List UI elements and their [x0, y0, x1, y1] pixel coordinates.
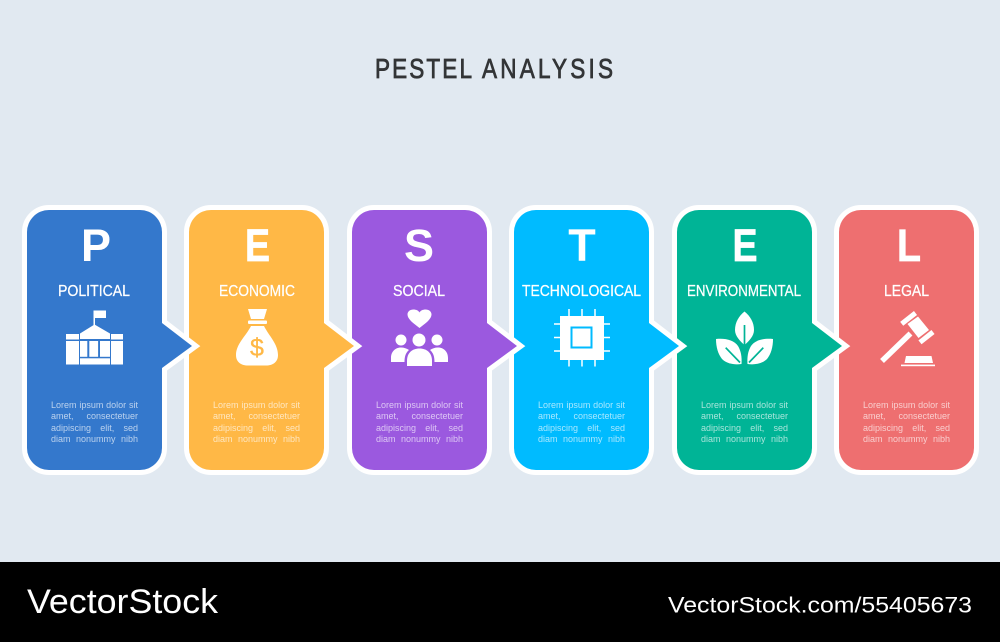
body text: diam nonummy nibh: [376, 434, 463, 444]
body text: [538, 400, 625, 444]
body text: [376, 400, 463, 444]
body text: Lorem ipsum dolor sit: [701, 400, 788, 410]
body text: Lorem ipsum dolor sit: [51, 400, 138, 410]
letter P: P: [81, 220, 111, 271]
body text: amet, consectetuer: [538, 411, 625, 421]
card shape: [677, 210, 842, 470]
icon: gavel: [882, 313, 935, 366]
body text: adipiscing elit, sed: [213, 422, 300, 432]
title: PESTEL: [375, 54, 472, 84]
panel: environmental: [672, 205, 850, 475]
icon: microchip: [554, 309, 610, 366]
icon: government building: [66, 310, 123, 364]
title: ANALYSIS: [482, 54, 613, 84]
panel: economic: [184, 205, 362, 475]
panel: political: [22, 205, 200, 475]
card shape: [27, 210, 192, 470]
heading: social: SOCIAL: [393, 283, 445, 300]
letter E: E: [245, 220, 270, 271]
watermark logo: VectorStock: [27, 583, 219, 621]
watermark url: VectorStock.com/55405673: [668, 592, 972, 617]
letter T: T: [568, 220, 596, 271]
body text: adipiscing elit, sed: [376, 422, 463, 432]
title: [375, 54, 613, 84]
panel: legal: [834, 205, 979, 475]
body text: amet, consectetuer: [376, 411, 463, 421]
card shape: [352, 210, 517, 470]
body text: amet, consectetuer: [213, 411, 300, 421]
body text: Lorem ipsum dolor sit: [538, 400, 625, 410]
body text: diam nonummy nibh: [863, 434, 950, 444]
card shape: [514, 210, 679, 470]
body text: adipiscing elit, sed: [701, 422, 788, 432]
footer bar: [0, 562, 1000, 642]
body text: adipiscing elit, sed: [863, 422, 950, 432]
body text: amet, consectetuer: [701, 411, 788, 421]
heading: economic: ECONOMIC: [219, 283, 295, 300]
icon: people with heart: [391, 310, 448, 366]
body text: amet, consectetuer: [863, 411, 950, 421]
body text: Lorem ipsum dolor sit: [863, 400, 950, 410]
icon: money bag: [236, 309, 278, 366]
body text: diam nonummy nibh: [51, 434, 138, 444]
card shape: [839, 210, 974, 470]
letter S: S: [404, 220, 434, 271]
body text: diam nonummy nibh: [213, 434, 300, 444]
panel: social: [347, 205, 526, 475]
body text: amet, consectetuer: [51, 411, 138, 421]
body text: [51, 400, 138, 444]
body text: diam nonummy nibh: [538, 434, 625, 444]
panel: technological: [509, 205, 688, 475]
letter L: L: [897, 220, 921, 271]
body text: diam nonummy nibh: [701, 434, 788, 444]
letter E: E: [732, 220, 758, 271]
body text: [863, 400, 950, 444]
body text: [213, 400, 300, 444]
body text: Lorem ipsum dolor sit: [376, 400, 463, 410]
body text: Lorem ipsum dolor sit: [213, 400, 300, 410]
body text: adipiscing elit, sed: [538, 422, 625, 432]
card shape: [189, 210, 354, 470]
body text: [701, 400, 788, 444]
heading: environmental: ENVIRONMENTAL: [687, 283, 801, 300]
heading: legal: LEGAL: [884, 283, 929, 300]
heading: technological: TECHNOLOGICAL: [522, 283, 641, 300]
icon: money bag: $: [250, 334, 264, 362]
heading: political: POLITICAL: [58, 283, 130, 300]
body text: adipiscing elit, sed: [51, 422, 138, 432]
icon: leaves: [716, 312, 773, 364]
